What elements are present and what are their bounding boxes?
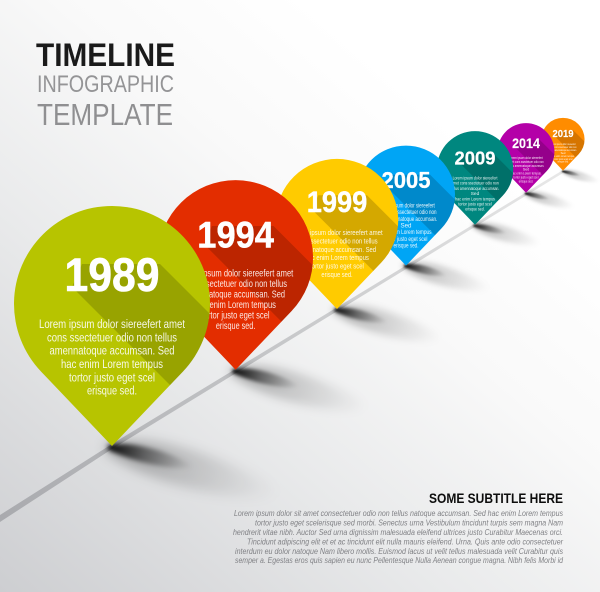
pin: 2005: 2005 [382,167,430,193]
pin: 1989: tortor justo eget scel [69,370,155,384]
pin: 2005: tortor justo eget scel [384,236,428,243]
pin: 1999: amennatoque accumsan. Sed [298,245,376,254]
pin: 2014: tellus amennatoque accumsan. [508,164,544,168]
pin: 2009 [438,131,514,225]
pin: 2005 [366,146,455,266]
pin: 2009: Sed [471,191,480,197]
pin: 1994: Lorem ipsum dolor siereefert amet [178,269,293,280]
pin: 1994: amennatoque accumsan. Sed [186,290,285,301]
pin: 1999: hac enim Lorem tempus [305,253,369,262]
pin: 1999: tortor justo eget scel [310,262,364,271]
timeline axis [0,170,563,522]
pin: 2019: amet cons ssectetuer odio non [550,145,577,149]
pin: 2014: tortor justo eget scel [514,175,539,179]
pin: 2014: Sed [523,168,529,172]
pin: 2019 [544,118,585,170]
pin: 2009: Lorem ipsum dolor siereefert [453,176,498,182]
pin: 1994: hac enim Lorem tempus [195,300,276,311]
pin: 1999: 1999 [307,186,367,219]
ground shadows under pins [106,170,600,498]
title: TEMPLATE [37,97,173,132]
pin: 1994: tortor justo eget scel [202,311,270,322]
pin: 2005: Lorem ipsum dolor siereefert [377,203,435,210]
pin: 1989: Lorem ipsum dolor siereefert amet [39,317,185,331]
title: INFOGRAPHIC [37,71,174,98]
pin: 2019: tortor justo eget scel [554,157,573,161]
pin: 1989: hac enim Lorem tempus [61,357,163,371]
pin: 2009: hac enim Lorem tempus [455,196,495,202]
pin: 1999: Lorem ipsum dolor siereefert amet [291,228,383,237]
pin: 1989: cons ssectetuer odio non tellus [47,330,177,344]
pin: 2014: erisque sed. [519,179,533,183]
pin: 2005: erisque sed. [394,243,419,250]
pin: 2009: tortor justo eget scel [458,202,492,208]
pin: 2005: hac enim Lorem tempus [380,229,432,236]
pin: 2019: Lorem ipsum dolor siereefert [550,142,576,146]
pin: 2009: 2009 [455,147,495,168]
body text block [233,508,564,565]
title [36,37,175,132]
pin: 2014: Lorem ipsum dolor siereefert [509,156,543,160]
pin: 2005: Sed [400,223,412,230]
pin: 1989 [14,206,210,446]
pin: 1994 [166,180,313,370]
pin: 2014 [500,123,554,193]
pin: 1994: 1994 [197,213,274,255]
pin: 1989: erisque sed. [87,384,137,398]
pin: 2009: erisque sed. [465,207,485,213]
pin: 2009: amet cons ssectetuer odio non [451,181,499,187]
pin: 2019: 2019 [552,129,574,140]
pin: 2014: amet cons ssectetuer odio non [508,160,544,164]
pin: 2019: erisque sed. [558,160,569,164]
pin: 2009: tellus amennatoque accumsan. [451,186,499,192]
pin: 1994: cons ssectetuer odio non tellus [184,279,287,290]
pin: 1999 [281,158,398,309]
pin: 2014: hac enim Lorem tempus [511,172,541,176]
pin: 1989: 1989 [64,248,160,301]
pin: 2005: tellus amennatoque accumsan. [375,216,437,223]
title: TIMELINE [36,37,175,73]
pin: 2014: 2014 [512,136,540,151]
pin: 2019: tellus amennatoque accumsan. [549,148,577,152]
pin: 2005: amet cons ssectetuer odio non [376,209,437,216]
subtitle: SOME SUBTITLE HERE [429,490,563,506]
pin: 1999: erisque sed. [321,270,353,279]
pin: 1989: amennatoque accumsan. Sed [50,344,175,358]
pin: 2019: Sed [561,151,566,155]
pin: 2019: hac enim Lorem tempus [552,154,575,158]
pin: 1999: cons ssectetuer odio non tellus [296,237,378,246]
pin: 1994: erisque sed. [216,321,255,332]
